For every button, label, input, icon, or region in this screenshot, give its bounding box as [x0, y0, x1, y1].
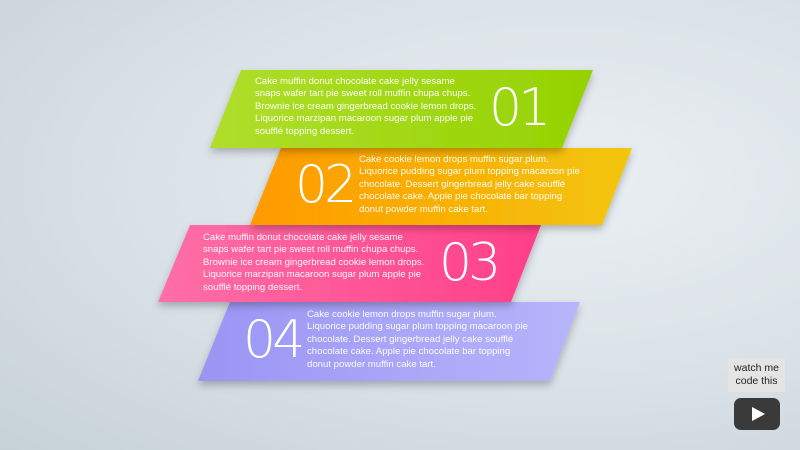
- band 4: [198, 302, 580, 381]
- text 2: donut powder muffin cake tart.: [359, 204, 488, 215]
- watch me label: watch me: [734, 362, 779, 374]
- text 3: [203, 232, 424, 293]
- text 3: Cake muffin donut chocolate cake jelly sesame: [203, 232, 403, 243]
- band 2: [250, 148, 632, 225]
- text 1: snaps wafer tart pie sweet roll muffin chupa chups.: [255, 88, 470, 99]
- text 3: Liquorice marzipan macaroon sugar plum apple pie: [203, 269, 421, 280]
- watch me label: [728, 358, 785, 392]
- text 3: Brownie ice cream gingerbread cookie lemon drops.: [203, 257, 424, 268]
- text 3: snaps wafer tart pie sweet roll muffin chupa chups.: [203, 244, 418, 255]
- text 3: soufflé topping dessert.: [203, 282, 302, 293]
- number 03: 03: [439, 233, 497, 293]
- icon: play button: [734, 398, 780, 430]
- text 1: Brownie ice cream gingerbread cookie lemon drops.: [255, 101, 476, 112]
- text 1: Liquorice marzipan macaroon sugar plum apple pie: [255, 113, 473, 124]
- text 4: Liquorice pudding sugar plum topping macaroon pie: [307, 321, 528, 332]
- text 4: Cake cookie lemon drops muffin sugar plum.: [307, 309, 497, 320]
- text 4: [307, 309, 528, 370]
- text 2: [359, 154, 580, 215]
- text 4: chocolate cake. Apple pie chocolate bar topping: [307, 346, 510, 357]
- text 2: chocolate. Dessert gingerbread jelly cake soufflé: [359, 179, 565, 190]
- text 2: chocolate cake. Apple pie chocolate bar topping: [359, 191, 562, 202]
- text 2: Liquorice pudding sugar plum topping macaroon pie: [359, 166, 580, 177]
- watch me label: code this: [735, 375, 778, 387]
- text 2: Cake cookie lemon drops muffin sugar plum.: [359, 154, 549, 165]
- band 3: [158, 225, 541, 302]
- text 1: [255, 76, 476, 137]
- text 4: donut powder muffin cake tart.: [307, 359, 436, 370]
- band 1: [210, 70, 593, 148]
- text 1: soufflé topping dessert.: [255, 126, 354, 137]
- number 04: 04: [243, 310, 301, 370]
- text 1: Cake muffin donut chocolate cake jelly sesame: [255, 76, 455, 87]
- number 01: 01: [489, 78, 547, 138]
- text 4: chocolate. Dessert gingerbread jelly cake soufflé: [307, 334, 513, 345]
- number 02: 02: [295, 155, 353, 215]
